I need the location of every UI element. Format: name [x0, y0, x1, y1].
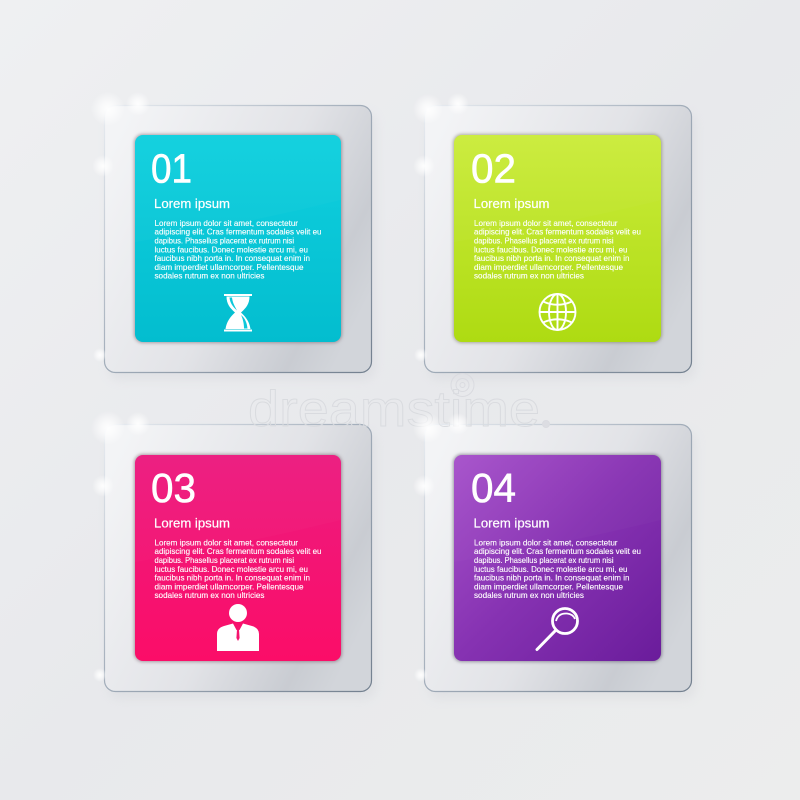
body text 01: Lorem ipsum dolor sit amet, consectetur — [154, 219, 298, 228]
frame 02 — [424, 106, 692, 372]
body text 02: sodales rutrum ex non ultricies — [474, 272, 584, 281]
colour card 04 — [454, 455, 661, 661]
watermark: dreamstime — [248, 381, 540, 437]
body text 02: diam imperdiet ullamcorper. Pellentesque — [474, 263, 623, 272]
body text 04: faucibus nibh porta in. In consequat enim in — [474, 574, 630, 582]
frame 01 — [104, 106, 372, 372]
frame 04 — [424, 424, 692, 692]
gloss 02 — [454, 135, 661, 242]
number 04: 04 — [471, 465, 516, 511]
body text 04: diam imperdiet ullamcorper. Pellentesque — [474, 582, 623, 591]
body text 03: luctus faucibus. Donec molestie arcu mi, eu — [154, 565, 308, 574]
body text 03 — [154, 538, 322, 600]
body text 03: Lorem ipsum dolor sit amet, consectetur — [154, 538, 298, 548]
body text 04: adipiscing elit. Cras fermentum sodales velit eu — [474, 547, 641, 556]
colour card 01 — [135, 135, 341, 342]
body text 03: adipiscing elit. Cras fermentum sodales velit eu — [154, 547, 322, 556]
body text 01: adipiscing elit. Cras fermentum sodales velit eu — [154, 228, 322, 237]
body text 02 — [474, 219, 641, 281]
heading 01: Lorem ipsum — [154, 196, 230, 211]
body text 02: luctus faucibus. Donec molestie arcu mi, eu — [474, 245, 628, 254]
number 01: 01 — [151, 146, 192, 192]
gloss 01 — [135, 135, 341, 242]
body text 01: diam imperdiet ullamcorper. Pellentesque — [154, 263, 304, 272]
body text 01: faucibus nibh porta in. In consequat enim in — [154, 254, 310, 263]
heading 04: Lorem ipsum — [474, 516, 550, 530]
body text 03: faucibus nibh porta in. In consequat enim in — [154, 574, 310, 582]
panel: step 01 — [104, 106, 376, 380]
icon: businessman — [217, 604, 259, 651]
colour card 03 — [135, 455, 341, 661]
body text 01: luctus faucibus. Donec molestie arcu mi, eu — [154, 245, 308, 254]
body text 01: dapibus. Phasellus placerat ex rutrum nisi — [154, 236, 294, 246]
body text 01 — [154, 219, 322, 281]
lens flares — [91, 92, 469, 682]
body text 03: dapibus. Phasellus placerat ex rutrum nisi — [154, 556, 294, 565]
body text 04 — [474, 538, 641, 600]
card shadow 03 — [134, 454, 342, 662]
colour card 02 — [454, 135, 661, 342]
panel: step 04 — [424, 424, 696, 699]
body text 03: diam imperdiet ullamcorper. Pellentesque — [154, 582, 304, 591]
card shadow 02 — [453, 134, 662, 343]
body text 04: luctus faucibus. Donec molestie arcu mi, eu — [474, 565, 628, 574]
gloss 04 — [454, 455, 661, 562]
panel: step 03 — [104, 424, 376, 699]
number 03: 03 — [151, 465, 196, 511]
body text 02: adipiscing elit. Cras fermentum sodales velit eu — [474, 228, 641, 237]
panel: step 02 — [424, 106, 696, 380]
body text 01: sodales rutrum ex non ultricies — [154, 272, 264, 281]
heading 03: Lorem ipsum — [154, 516, 230, 530]
number 02: 02 — [471, 146, 516, 192]
icon: globe — [540, 294, 576, 330]
frame 03 — [104, 424, 372, 692]
card shadow 01 — [134, 134, 342, 343]
icon: magnifying glass — [537, 608, 578, 650]
body text 03: sodales rutrum ex non ultricies — [154, 591, 264, 600]
heading 02: Lorem ipsum — [474, 196, 550, 211]
card shadow 04 — [453, 454, 662, 662]
body text 02: faucibus nibh porta in. In consequat enim in — [474, 254, 630, 263]
icon: hourglass — [224, 294, 252, 332]
body text 04: dapibus. Phasellus placerat ex rutrum nisi — [474, 556, 614, 565]
body text 04: Lorem ipsum dolor sit amet, consectetur — [474, 538, 618, 548]
body text 02: Lorem ipsum dolor sit amet, consectetur — [474, 219, 618, 228]
body text 02: dapibus. Phasellus placerat ex rutrum nisi — [474, 236, 614, 246]
gloss 03 — [135, 455, 341, 562]
body text 04: sodales rutrum ex non ultricies — [474, 591, 584, 600]
